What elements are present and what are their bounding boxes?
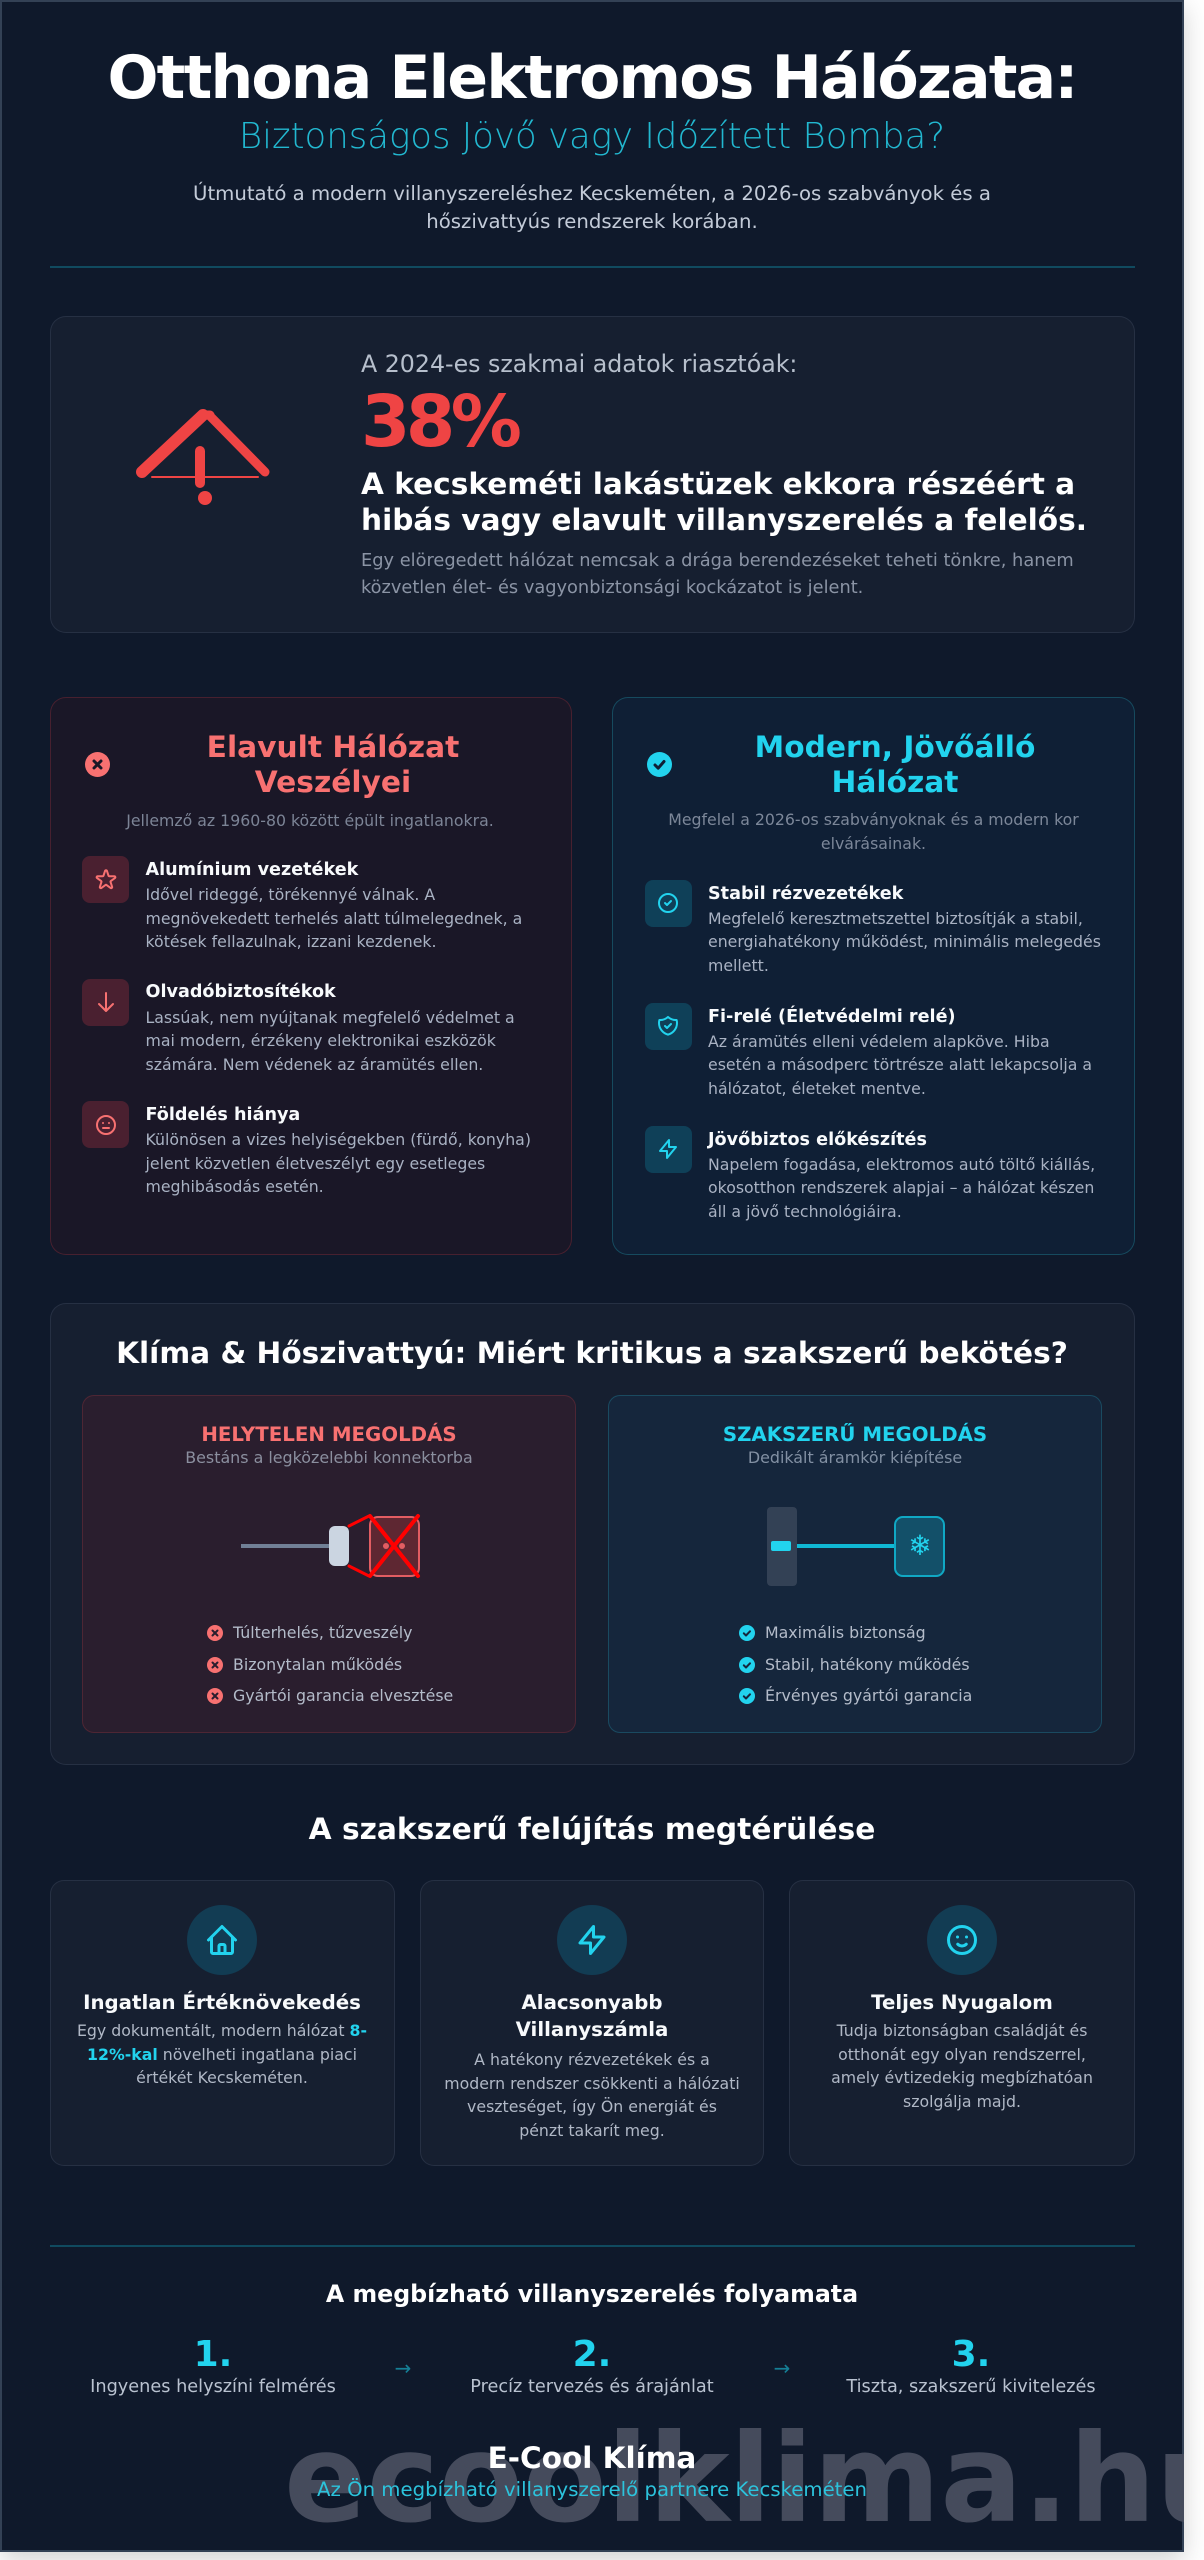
item: fuses [82, 979, 515, 1074]
panel subtitle: Jellemző az 1960-80 között épült ingatlanokra. [126, 811, 494, 830]
item: future ready: okosotthon rendszerek alapjai – a hálózat készen [708, 1178, 1094, 1197]
step 1: Ingyenes helyszíni felmérés [90, 2377, 336, 2397]
icon: check [739, 1625, 755, 1641]
diagram: plug in socket crossed out [241, 1514, 420, 1578]
intro text [193, 182, 991, 233]
list: benefits [739, 1623, 972, 1705]
brand tagline: Az Ön megbízható villanyszerelő partnere Kecskeméten [317, 2478, 867, 2501]
intro text: hőszivattyús rendszerek korában. [426, 210, 758, 233]
section heading: payoff: A szakszerű felújítás megtérülése [309, 1812, 875, 1847]
panel title [755, 730, 1035, 800]
item: future ready: Jövőbiztos előkészítés [708, 1130, 927, 1150]
icon: home [187, 1905, 257, 1975]
item: RCD: hálózatot, életeket mentve. [708, 1079, 926, 1098]
card: peace of mind [789, 1880, 1135, 2166]
sublabel: Dedikált áramkör kiépítése [748, 1448, 962, 1467]
item: future ready: Napelem fogadása, elektromos autó töltő kiállás, [708, 1154, 1095, 1174]
list: risks: Bizonytalan működés [233, 1655, 402, 1674]
list: benefits: Stabil, hatékony működés [765, 1655, 970, 1674]
card text: értékét Kecskeméten. [136, 2068, 308, 2087]
label: SZAKSZERŰ MEGOLDÁS [723, 1423, 987, 1446]
card text: pénzt takarít meg. [519, 2121, 665, 2140]
list: benefits: Érvényes gyártói garancia [765, 1686, 972, 1705]
statistic detail: közvetlen élet- és vagyonbiztonsági kockázatot is jelent. [361, 576, 863, 598]
panel title: Modern, Jövőálló [755, 730, 1035, 764]
card title: Villanyszámla [516, 2018, 668, 2041]
arrow: → [774, 2356, 790, 2380]
card text: Tudja biztonságban családját és [837, 2021, 1087, 2040]
item: aluminium: Idővel rideggé, törékennyé válnak. A [146, 885, 435, 904]
card text: veszteséget, így Ön energiát és [467, 2097, 717, 2116]
statistic statement: hibás vagy elavult villanyszerelés a felelős. [361, 503, 1087, 537]
step 3: Tiszta, szakszerű kivitelezés [846, 2377, 1096, 2397]
item: grounding [82, 1101, 531, 1196]
item: copper wires [645, 880, 1101, 975]
card text: Egy dokumentált, modern hálózat 8- [77, 2021, 367, 2040]
card title: Teljes Nyugalom [871, 1990, 1053, 2014]
card title: Ingatlan Értéknövekedés [83, 1990, 361, 2014]
panel: air conditioning wiring [50, 1303, 1135, 1765]
big number 38%: 38% [361, 380, 517, 463]
panel title: Hálózat [832, 764, 958, 800]
item: fuses: mai modern, érzékeny elektronikai eszközök [146, 1031, 496, 1050]
card: property value [50, 1880, 395, 2166]
step 1: 1. [194, 2334, 232, 2375]
panel: 38% statistic [50, 316, 1135, 633]
panel: modern network [612, 697, 1135, 1255]
icon: lightning bolt [644, 1126, 692, 1172]
item: aluminium: megnövekedett terhelés alatt túlmelegednek, a [146, 909, 522, 928]
item: aluminium: kötések fellazulnak, izzani kezdenek. [146, 932, 437, 951]
step 2: 2. [573, 2334, 611, 2375]
label: HELYTELEN MEGOLDÁS [201, 1423, 457, 1446]
statistic statement: A kecskeméti lakástüzek ekkora részéért a [361, 467, 1075, 501]
card text: amely évtizedekig megbízhatóan [831, 2068, 1093, 2087]
item: copper wires: Megfelelő keresztmetszettel biztosítják a stabil, [708, 908, 1083, 928]
brand name: E-Cool Klíma [488, 2441, 696, 2475]
step 1 [90, 2334, 336, 2397]
card text: 12%-kal növelheti ingatlana piaci [87, 2045, 357, 2064]
icon: smile [927, 1905, 997, 1975]
diagram: dedicated circuit [767, 1507, 945, 1586]
card title: Alacsonyabb [522, 1990, 662, 2014]
intro text: Útmutató a modern villanyszereléshez Kecskeméten, a 2026-os szabványok és a [193, 182, 991, 205]
panel subtitle: Megfelel a 2026-os szabványoknak és a modern kor [668, 810, 1079, 829]
lead text: A 2024-es szakmai adatok riasztóak: [361, 350, 797, 378]
item: fuses: Lassúak, nem nyújtanak megfelelő védelmet a [146, 1008, 515, 1026]
icon: x [207, 1625, 223, 1641]
header [107, 43, 1077, 233]
panel: professional solution [608, 1395, 1102, 1733]
item: fuses: Olvadóbiztosítékok [146, 982, 336, 1002]
item: copper wires: Stabil rézvezetékek [708, 884, 903, 904]
statistic statement [361, 467, 1087, 537]
card title [516, 1990, 668, 2041]
item: aluminium: Alumínium vezetékek [146, 860, 358, 880]
item: aluminium [82, 856, 522, 951]
step 3: 3. [952, 2334, 990, 2375]
panel: outdated network [50, 697, 572, 1255]
step 3 [846, 2334, 1096, 2397]
icon: x [207, 1657, 223, 1673]
card text: modern rendszer csökkenti a hálózati [444, 2074, 740, 2093]
step 2: Precíz tervezés és árajánlat [470, 2377, 714, 2397]
card text [77, 2021, 367, 2087]
item: fuses: számára. Nem védenek az áramütés ellen. [146, 1055, 483, 1074]
item: RCD: esetén a másodperc törtrésze alatt lekapcsolja a [708, 1055, 1092, 1074]
card text [831, 2021, 1093, 2111]
item: grounding: jelent közvetlen életveszélyt egy esetleges [146, 1154, 485, 1173]
statistic detail: Egy elöregedett hálózat nemcsak a drága berendezéseket teheti tönkre, hanem [361, 550, 1074, 570]
step 2 [470, 2334, 714, 2397]
panel subtitle: elvárásainak. [821, 834, 926, 853]
panel title [207, 730, 459, 800]
list: risks [207, 1623, 453, 1705]
list: benefits: Maximális biztonság [765, 1623, 926, 1642]
icon: arrow down [82, 978, 129, 1026]
subtitle: Biztonságos Jövő vagy Időzített Bomba? [239, 116, 945, 157]
card: lower bill [420, 1880, 764, 2166]
item: grounding: meghibásodás esetén. [146, 1177, 324, 1196]
icon: x circle [85, 752, 110, 777]
panel: wrong solution [82, 1395, 576, 1733]
item: RCD: Fi-relé (Életvédelmi relé) [708, 1007, 956, 1027]
card text [444, 2050, 740, 2140]
section heading: Klíma & Hőszivattyú: Miért kritikus a szakszerű bekötés? [116, 1336, 1068, 1370]
panel subtitle [668, 810, 1079, 853]
icon: x [207, 1688, 223, 1704]
list: risks: Túlterhelés, tűzveszély [233, 1623, 412, 1642]
section heading: process: A megbízható villanyszerelés folyamata [326, 2280, 858, 2308]
item: copper wires: energiahatékony működést, minimális melegedés [708, 932, 1101, 951]
item: RCD: Az áramütés elleni védelem alapköve. Hiba [708, 1032, 1050, 1050]
title: Otthona Elektromos Hálózata: [107, 43, 1077, 113]
item: grounding: Különösen a vizes helyiségekben (fürdő, konyha) [146, 1130, 531, 1149]
icon: check circle outline [644, 880, 692, 926]
icon: lightning bolt [557, 1905, 627, 1975]
panel title: Elavult Hálózat [207, 730, 459, 764]
sublabel: Bestáns a legközelebbi konnektorba [185, 1448, 473, 1467]
icon: shield check [644, 1002, 692, 1050]
item: RCD [645, 1003, 1092, 1098]
card text: otthonát egy olyan rendszerrel, [838, 2045, 1086, 2064]
icon: warning triangle [136, 409, 270, 505]
statistic detail [361, 550, 1074, 598]
panel title: Veszélyei [255, 764, 411, 800]
item: grounding: Földelés hiánya [146, 1104, 300, 1124]
item: future ready [645, 1126, 1095, 1221]
icon: star [82, 856, 129, 903]
diagram: dedicated circuit: ❄ [908, 1529, 932, 1562]
item: future ready: áll a jövő technológiáira. [708, 1202, 902, 1221]
card text: szolgálja majd. [903, 2092, 1021, 2111]
icon: neutral face [82, 1101, 129, 1148]
item: copper wires: mellett. [708, 956, 769, 975]
list: risks: Gyártói garancia elvesztése [233, 1686, 453, 1705]
icon: check [739, 1688, 755, 1704]
icon: check circle [647, 752, 672, 777]
arrow: → [395, 2356, 411, 2380]
icon: check [739, 1657, 755, 1673]
card text: A hatékony rézvezetékek és a [474, 2050, 710, 2069]
